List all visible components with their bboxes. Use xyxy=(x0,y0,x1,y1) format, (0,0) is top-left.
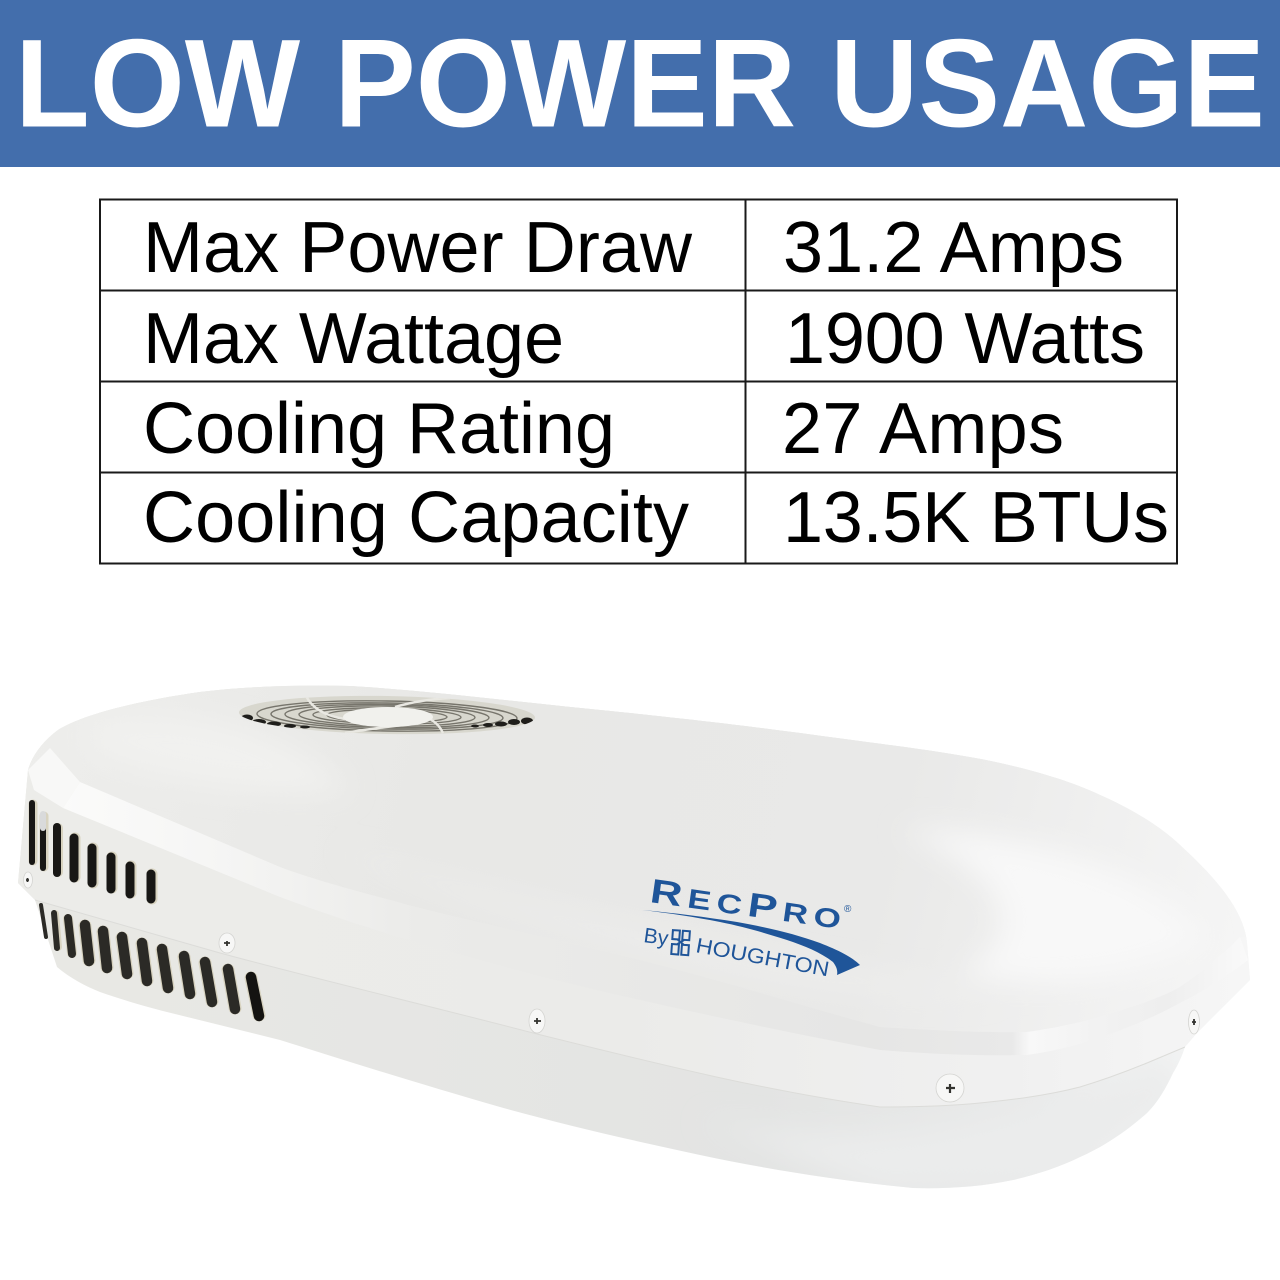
upper chamfer facet xyxy=(28,748,80,808)
row: max wattage: 1900 Watts xyxy=(785,299,1145,379)
upper vent slots xyxy=(32,803,152,899)
lower side highlight xyxy=(700,1060,1180,1190)
row: cooling capacity xyxy=(143,478,1169,558)
soft highlights xyxy=(954,839,1104,972)
title: LOW POWER USAGE xyxy=(15,14,1265,154)
logo registered mark: ® xyxy=(844,904,852,915)
chamfer band xyxy=(64,782,926,1052)
header banner xyxy=(0,0,1280,167)
seam xyxy=(35,900,1185,1107)
row: max wattage xyxy=(143,299,1145,379)
air conditioner unit illustration xyxy=(0,680,1280,1200)
row: max power draw xyxy=(143,208,1124,288)
logo houghton: HOUGHTON xyxy=(694,934,831,981)
fan grille xyxy=(239,696,535,734)
row: cooling rating: Cooling Rating xyxy=(143,389,615,469)
logo wordmark: RECPRO xyxy=(648,872,844,936)
logo swoosh xyxy=(642,910,860,975)
unit body xyxy=(0,680,1280,1200)
screws xyxy=(24,872,1200,1102)
row: cooling rating xyxy=(143,389,1064,469)
row: max wattage: Max Wattage xyxy=(143,299,564,379)
fan dark openings xyxy=(241,714,533,728)
logo emblem xyxy=(671,930,690,955)
row: max power draw: Max Power Draw xyxy=(143,208,693,288)
lower vent slots xyxy=(41,905,259,1016)
row: cooling rating: 27 Amps xyxy=(782,389,1064,469)
cover top surface xyxy=(0,680,1280,1032)
row: cooling capacity: Cooling Capacity xyxy=(143,478,689,558)
logo byline: By xyxy=(642,924,670,950)
fan hub xyxy=(343,707,433,727)
fan spokes xyxy=(306,696,450,733)
row: max power draw: 31.2 Amps xyxy=(783,208,1124,288)
specifications table xyxy=(100,200,1177,564)
logo: RecPro by Houghton xyxy=(642,872,860,981)
row: cooling capacity: 13.5K BTUs xyxy=(783,478,1169,558)
fan grille rings xyxy=(257,699,517,733)
rim band xyxy=(676,1008,1056,1106)
